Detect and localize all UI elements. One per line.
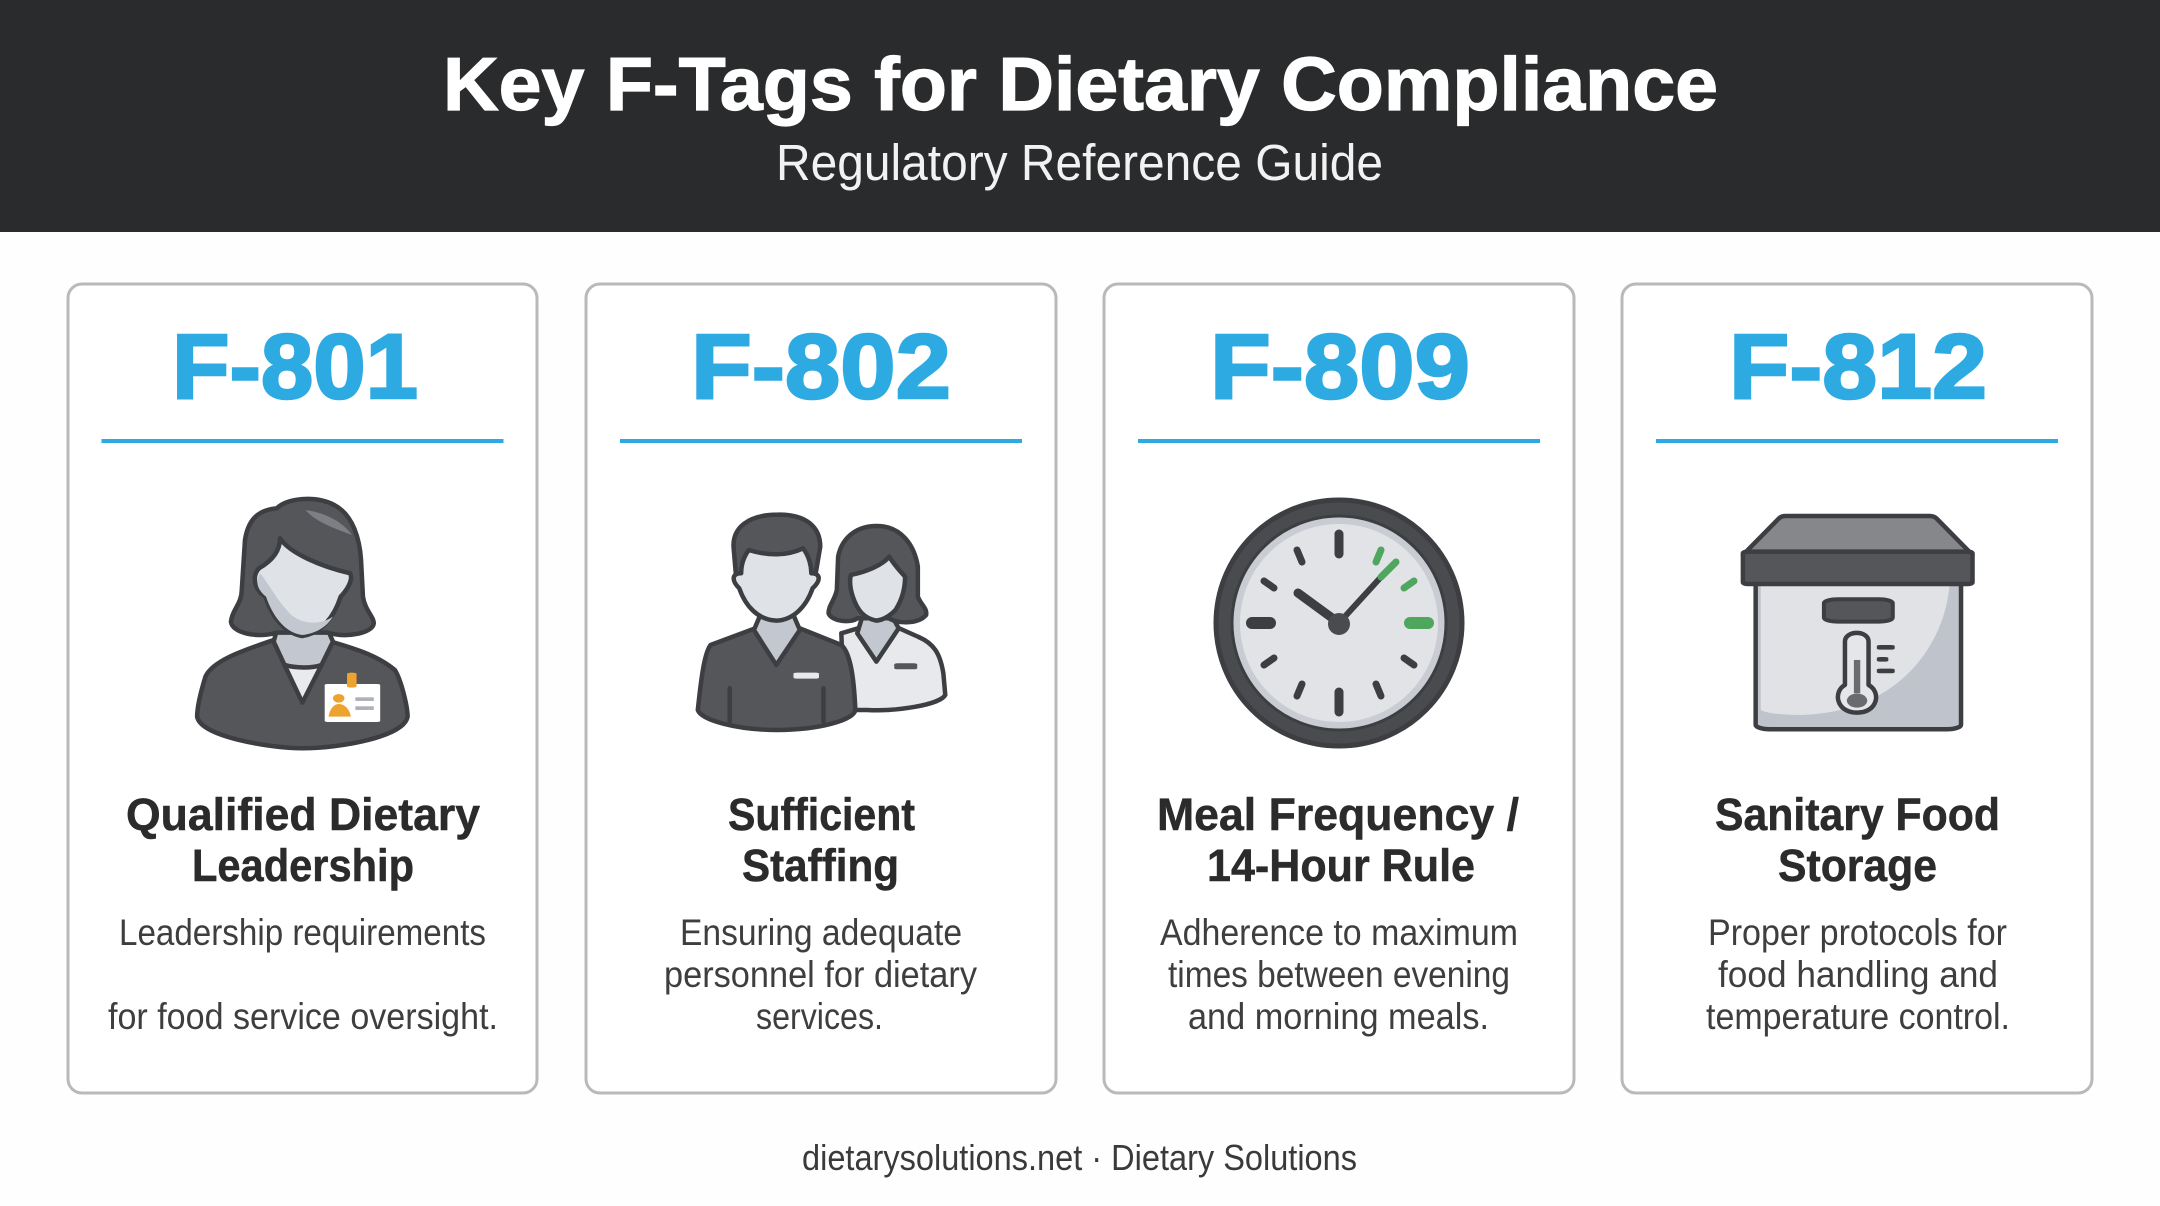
tag number F-801: F-801 [172, 316, 418, 418]
panel: F-801 [68, 284, 537, 1093]
heading [126, 789, 480, 891]
description [1706, 912, 2010, 1037]
description: Leadership requirements [119, 912, 486, 953]
description: personnel for dietary [664, 954, 977, 995]
icon: food storage box with thermometer [1743, 516, 1973, 729]
description: and morning meals. [1188, 996, 1489, 1037]
heading: Storage [1778, 840, 1937, 891]
description: Proper protocols for [1708, 912, 2007, 953]
description: times between evening [1168, 954, 1510, 995]
heading: Sufficient [728, 789, 915, 840]
panel: F-809 [1104, 284, 1574, 1093]
heading: 14-Hour Rule [1207, 840, 1475, 891]
heading [1157, 789, 1519, 891]
description: for food service oversight. [108, 996, 498, 1037]
panel: F-802 [586, 284, 1056, 1093]
title: Key F-Tags for Dietary Compliance [443, 42, 1718, 126]
tag number F-812: F-812 [1729, 316, 1987, 418]
description: Ensuring adequate [680, 912, 962, 953]
description [1160, 912, 1518, 1037]
icon: staff pair [698, 515, 945, 730]
panel: F-812 [1622, 284, 2092, 1093]
description: Adherence to maximum [1160, 912, 1518, 953]
tag number F-802: F-802 [691, 316, 951, 418]
tag number F-809: F-809 [1210, 316, 1470, 418]
heading: Leadership [192, 840, 414, 891]
description: food handling and [1718, 954, 1998, 995]
description: temperature control. [1706, 996, 2010, 1037]
heading: Meal Frequency / [1157, 789, 1519, 840]
header banner [0, 0, 2160, 232]
icon: dietary leader with badge [197, 499, 408, 748]
subtitle: Regulatory Reference Guide [776, 134, 1383, 191]
heading: Qualified Dietary [126, 789, 480, 840]
footer: dietarysolutions.net · Dietary Solutions [802, 1137, 1357, 1178]
heading: Sanitary Food [1715, 789, 2000, 840]
description [108, 912, 498, 1037]
heading [1715, 789, 2000, 891]
description [664, 912, 977, 1037]
heading [728, 789, 915, 891]
description: services. [756, 996, 883, 1037]
heading: Staffing [742, 840, 899, 891]
icon: clock [1216, 500, 1462, 746]
